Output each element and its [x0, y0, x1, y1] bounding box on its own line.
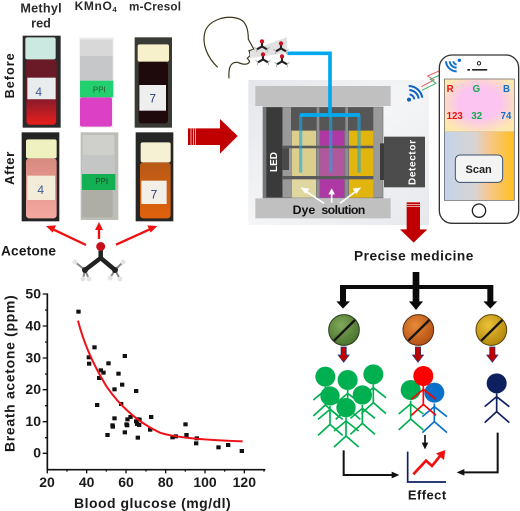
icon: green pill	[329, 315, 359, 345]
icon: human head profile	[204, 17, 254, 78]
heading: red: red	[31, 16, 51, 30]
vial: KMnO4 before	[79, 37, 114, 128]
black branching arrows	[336, 272, 497, 310]
RGB readout: 32	[471, 111, 482, 122]
small red arrows	[338, 347, 498, 362]
arrows: acetone to vials	[46, 222, 157, 245]
effect chart icon	[408, 450, 446, 482]
icon: wifi on device	[407, 86, 422, 102]
y-axis title: Breath acetone (ppm)	[1, 295, 17, 452]
breath acetone molecules	[250, 37, 290, 67]
panel: breath analyzer device	[188, 53, 519, 243]
x-axis tick labels: 60	[118, 474, 134, 490]
label: Effect: Effect	[408, 488, 447, 503]
vial: methyl red before	[23, 36, 61, 128]
device body	[248, 80, 429, 225]
y-axis tick labels: 20	[25, 381, 41, 397]
icon: acetone molecule	[72, 242, 126, 282]
x-axis tick labels	[39, 474, 256, 490]
label: Dye solution	[293, 203, 365, 217]
RGB readout: 74	[501, 111, 512, 122]
vial: m-Cresol before	[135, 37, 172, 128]
arrows to effect	[344, 433, 498, 478]
arrow: to precise medicine	[400, 202, 427, 243]
y-axis tick labels	[25, 285, 41, 461]
vial: m-Cresol after	[136, 132, 173, 221]
scan button	[455, 155, 503, 182]
scatter points	[76, 310, 244, 453]
RGB readout: R	[447, 84, 454, 95]
icon: wifi on phone	[446, 59, 461, 71]
label: Dye solution: Dye	[293, 203, 315, 217]
scan button: Scan	[466, 164, 492, 176]
y-axis tick labels: 40	[25, 317, 41, 333]
arrow: to device	[188, 119, 238, 154]
heading: m-Cresol: m-Cresol	[129, 0, 181, 13]
x-axis tick labels: 20	[39, 474, 55, 490]
dye cell: magenta	[320, 131, 344, 198]
icon: orange pill	[403, 315, 434, 345]
vial: KMnO4 after	[81, 132, 118, 220]
x-axis title: Blood glucose (mg/dl)	[74, 495, 231, 511]
label: Before: Before	[3, 53, 17, 98]
y-axis tick labels: 50	[25, 285, 41, 301]
wireless signal lines	[421, 68, 447, 90]
vial: m-Cresol before: 7	[149, 92, 156, 106]
mixed patient group	[399, 366, 447, 433]
panel: dye vials before and after	[1, 0, 181, 258]
green patient group	[313, 364, 386, 447]
RGB readout: G	[473, 84, 480, 95]
x-axis tick labels: 80	[158, 474, 174, 490]
vial: methyl red before: 4	[35, 85, 42, 99]
y-axis tick labels: 30	[25, 349, 41, 365]
RGB readout: 123	[447, 111, 463, 122]
y-axis tick labels: 10	[25, 413, 41, 429]
chart: breath acetone vs blood glucose	[1, 285, 265, 511]
smartphone	[439, 55, 519, 223]
y-axis tick labels: 0	[33, 445, 41, 461]
x-axis tick labels: 100	[193, 474, 217, 490]
vial: KMnO4 after: PPI	[95, 177, 108, 186]
x-axis tick labels: 120	[233, 474, 256, 490]
label: Dye solution: solution	[321, 203, 365, 217]
dye cell: yellow	[349, 131, 373, 198]
axes	[43, 293, 265, 473]
panel: precise medicine tree	[313, 249, 509, 503]
blue gas tube	[287, 53, 360, 173]
icon: yellow pill	[476, 315, 507, 345]
Detector: Detector	[408, 140, 419, 185]
vial: KMnO4 before: PPI	[93, 86, 106, 95]
Detector	[380, 137, 425, 187]
heading: KMnO4: 4	[112, 5, 117, 14]
vial: m-Cresol after: 7	[151, 188, 158, 202]
dye cell: pale yellow	[292, 131, 316, 198]
label: After: After	[2, 152, 17, 185]
label: Acetone: Acetone	[1, 243, 56, 258]
white arrows to dye cells	[300, 187, 361, 203]
x-axis tick labels: 40	[79, 474, 95, 490]
vial: methyl red after: 4	[37, 183, 44, 197]
fit curve	[78, 321, 243, 441]
LED: LED	[269, 152, 280, 172]
heading: Methyl: Methyl	[20, 2, 62, 16]
vial: methyl red after	[22, 132, 59, 221]
RGB readout: B	[503, 84, 510, 95]
LED	[266, 107, 289, 197]
navy patient	[485, 373, 509, 423]
heading: Precise medicine: Precise medicine	[354, 249, 474, 264]
RGB readout	[447, 84, 512, 122]
